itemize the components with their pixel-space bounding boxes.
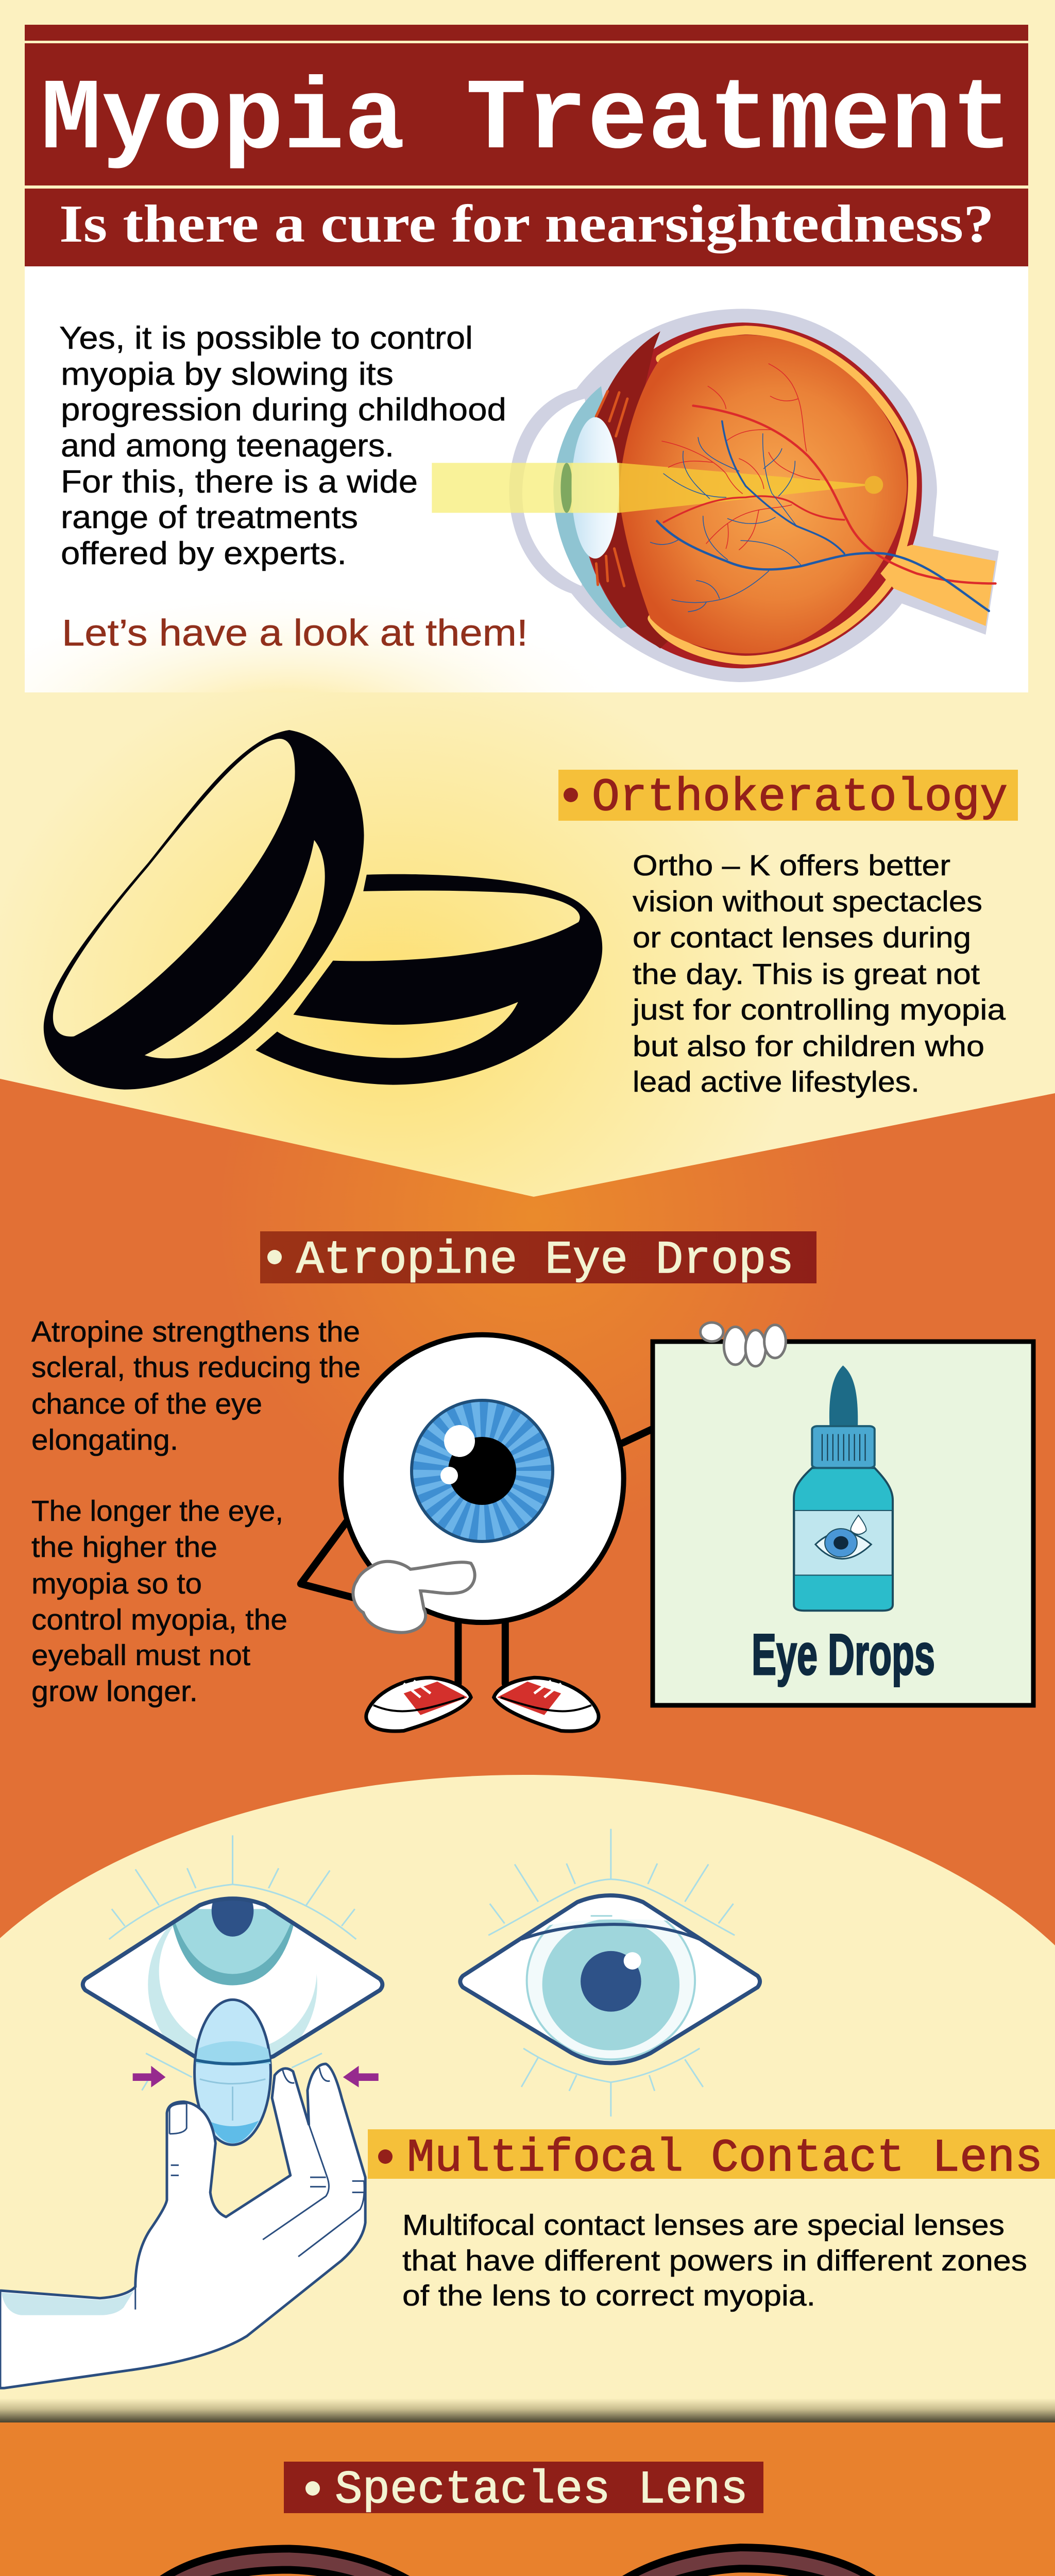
- intro paragraph: range of treatments: [61, 500, 358, 535]
- main title: Myopia Treatment: [41, 63, 1012, 178]
- section background: orange chevron atropine: [0, 1079, 1055, 1958]
- text: atropine description: elongating.: [31, 1423, 178, 1456]
- heading: orthokeratology: [558, 770, 1018, 824]
- text: atropine description: myopia so to: [31, 1567, 202, 1600]
- right eye: [460, 1882, 760, 2063]
- panel: eye drops sign: [653, 1323, 1033, 1705]
- text: multifocal description: [402, 2209, 1027, 2312]
- text: orthokeratology description: lead active lifestyles.: [633, 1065, 920, 1098]
- contact lens on fingertip: [195, 1999, 271, 2145]
- text: atropine description: scleral, thus reducing the: [31, 1351, 361, 1384]
- icon: eye anatomy: [432, 309, 999, 682]
- text: multifocal description: of the lens to correct myopia.: [402, 2279, 815, 2312]
- shoe left: [366, 1677, 471, 1731]
- eyeball: [341, 1335, 624, 1622]
- section background: orthokeratology glow: [0, 692, 1055, 1208]
- left eye: [80, 1896, 384, 2059]
- illustration: right eye with lens: [460, 1829, 760, 2116]
- text: atropine description: the higher the: [31, 1531, 217, 1564]
- text: orthokeratology description: the day. This is great not: [633, 958, 980, 991]
- heading text: Atropine Eye Drops: [296, 1234, 794, 1287]
- text: atropine description: control myopia, the: [31, 1603, 287, 1636]
- heading: multifocal contact lens: [368, 2129, 1055, 2185]
- text: orthokeratology description: or contact lenses during: [633, 921, 971, 954]
- heading: atropine eye drops: [260, 1231, 816, 1287]
- text: atropine description: eyeball must not: [31, 1639, 250, 1672]
- arrow right: [133, 2066, 165, 2088]
- illustration: eyeball character: [301, 1335, 656, 1731]
- arrow left: [343, 2066, 379, 2088]
- left rim: [134, 2559, 458, 2576]
- heading text: Spectacles Lens: [335, 2464, 748, 2517]
- text: atropine description: chance of the eye: [31, 1387, 262, 1420]
- hand details: [2, 2067, 364, 2315]
- text: orthokeratology description: [632, 849, 1006, 1098]
- right rim: [578, 2558, 905, 2576]
- text: multifocal description: that have different powers in different zones: [402, 2244, 1027, 2277]
- heading text: Multifocal Contact Lens: [407, 2132, 1043, 2185]
- text: atropine description: The longer the eye,: [31, 1495, 283, 1528]
- icon: eyeball iris: [412, 1400, 553, 1541]
- illustration: glasses: [79, 2558, 959, 2576]
- text: atropine description: grow longer.: [31, 1675, 198, 1708]
- text: atropine description: Atropine strengthens the: [31, 1315, 360, 1348]
- intro paragraph: Yes, it is possible to control: [59, 320, 473, 356]
- intro paragraph: [59, 320, 506, 571]
- shadow above spectacles section: [0, 2398, 1055, 2422]
- section background: multifocal cream arc: [0, 1775, 1055, 2422]
- lashes right: [488, 1829, 735, 2116]
- bullet: [564, 788, 578, 802]
- bullet: [305, 2481, 320, 2496]
- section glow: orange highlight: [0, 1079, 1055, 1546]
- subtitle text: Is there a cure for nearsightedness?: [59, 194, 994, 253]
- panel: intro: [25, 266, 1028, 692]
- subtitle band: [25, 189, 1028, 266]
- text: orthokeratology description: but also for children who: [633, 1030, 984, 1063]
- hand: [0, 2064, 365, 2388]
- pointing hand: [353, 1562, 475, 1633]
- heading: spectacles lens: [284, 2462, 763, 2517]
- text: multifocal description: Multifocal contact lenses are special lenses: [402, 2209, 1005, 2242]
- intro paragraph: myopia by slowing its: [61, 357, 394, 392]
- call to look: Let’s have a look at them!: [62, 613, 528, 654]
- intro paragraph: For this, there is a wide: [61, 464, 418, 500]
- text: orthokeratology description: just for controlling myopia: [632, 993, 1006, 1026]
- heading text: Orthokeratology: [592, 772, 1008, 824]
- illustration: contact lens insertion: [0, 1835, 382, 2388]
- intro paragraph: offered by experts.: [61, 536, 347, 571]
- arms and legs: [301, 1427, 656, 1684]
- text: orthokeratology description: vision without spectacles: [633, 885, 982, 918]
- text: atropine description: [31, 1315, 361, 1708]
- fingers on sign: [701, 1323, 786, 1366]
- icon: bottle: [701, 1323, 893, 1611]
- intro paragraph: and among teenagers.: [61, 428, 394, 464]
- bullet: [378, 2149, 393, 2164]
- bullet: [267, 1250, 282, 1264]
- shoe right: [494, 1677, 599, 1731]
- intro paragraph: progression during childhood: [61, 392, 506, 428]
- sign caption: Eye Drops: [752, 1622, 935, 1687]
- text: orthokeratology description: Ortho – K offers better: [633, 849, 950, 882]
- lashes left: [109, 1835, 356, 2090]
- section background: spectacles: [0, 2422, 1055, 2576]
- title panel: [25, 25, 1028, 185]
- icon: contact lenses: [44, 730, 602, 1090]
